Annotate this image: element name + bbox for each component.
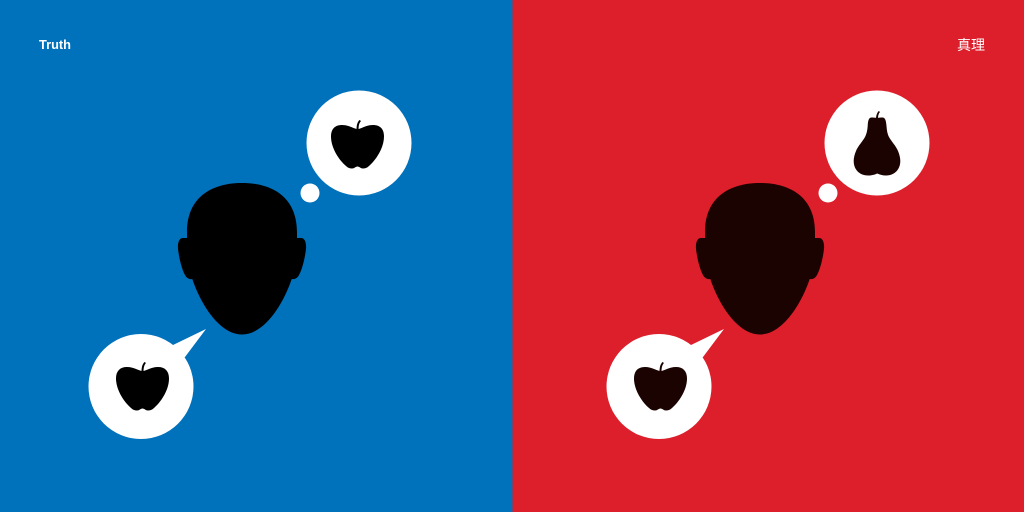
thought bubble large bbox=[306, 90, 412, 196]
icon: head silhouette bbox=[178, 183, 306, 334]
thought bubble small bbox=[300, 184, 320, 202]
icon: spoken apple bbox=[634, 362, 687, 410]
thought bubble small bbox=[818, 184, 838, 202]
icon: thought pear bbox=[854, 111, 900, 176]
thought bubble large bbox=[824, 90, 930, 196]
speech bubble bbox=[88, 329, 206, 439]
icon: thought apple bbox=[331, 120, 384, 168]
panel: Truth (blue) bbox=[0, 0, 512, 512]
heading: 真理: 真理 bbox=[957, 37, 985, 53]
speech bubble bbox=[606, 329, 724, 439]
panel: 真理 (red) bbox=[512, 0, 1024, 512]
icon: head silhouette bbox=[696, 183, 824, 334]
icon: spoken apple bbox=[116, 362, 169, 410]
heading: Truth: Truth bbox=[39, 37, 71, 52]
